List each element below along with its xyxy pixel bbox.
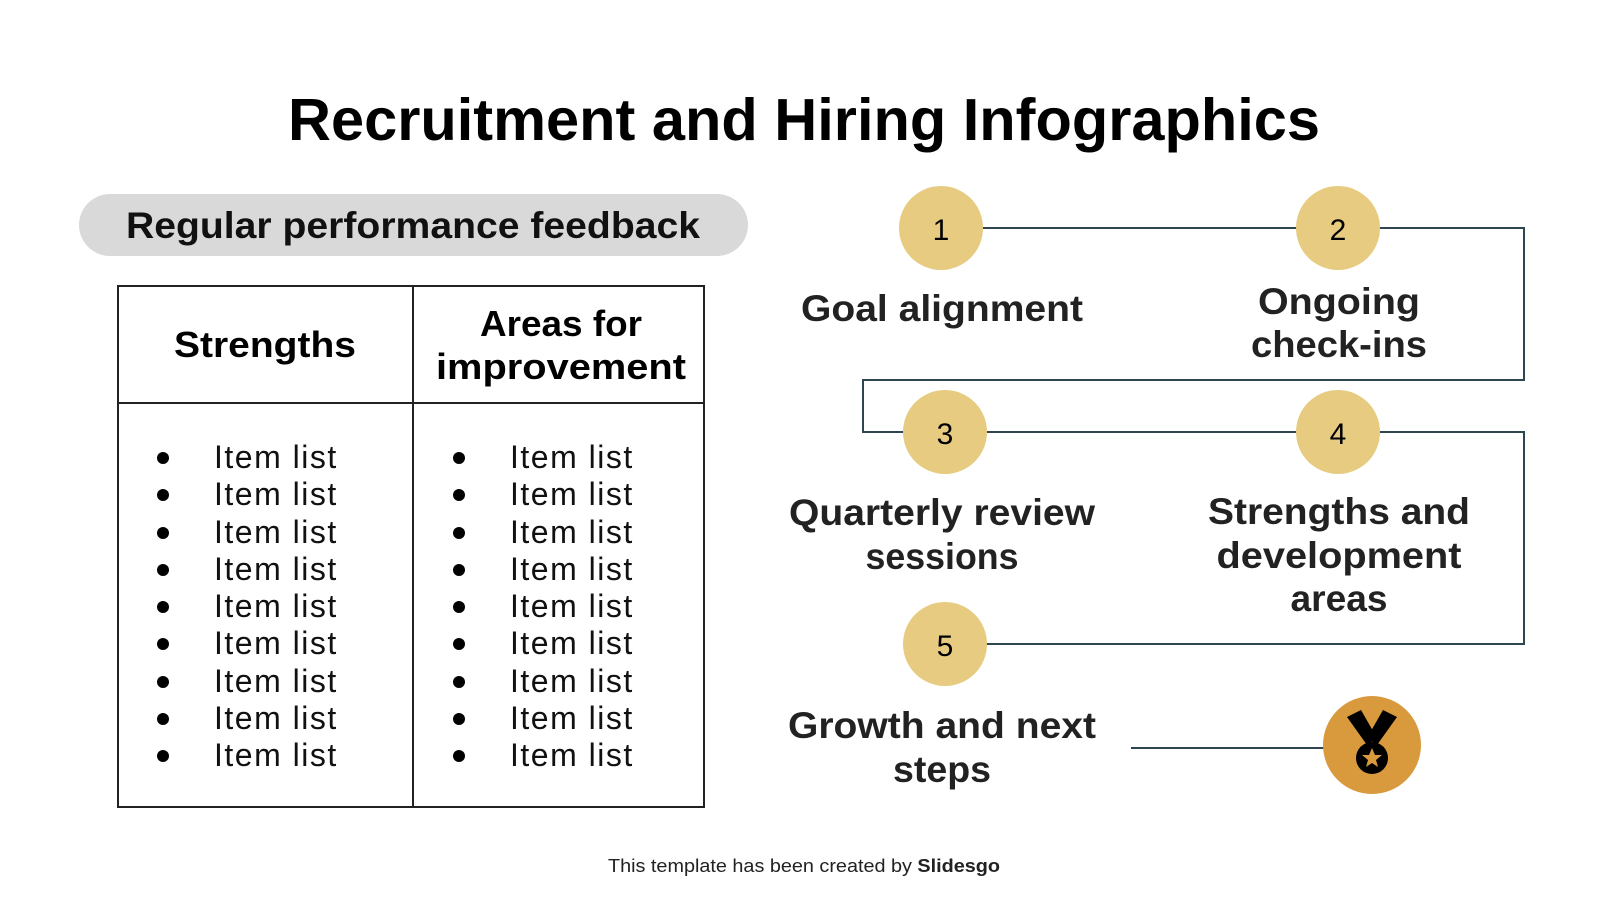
label 4: development bbox=[1216, 535, 1462, 576]
list: areas: Item list bbox=[510, 663, 634, 699]
connector path bbox=[863, 228, 1524, 644]
label 2: check-ins bbox=[1251, 324, 1427, 365]
header: areas for improvement: improvement bbox=[436, 346, 686, 387]
step 3: 3 bbox=[937, 418, 953, 451]
list: areas: Item list bbox=[510, 700, 634, 736]
title: Recruitment and Hiring Infographics bbox=[288, 87, 1320, 153]
list: strengths: Item list bbox=[214, 588, 338, 624]
list: areas: Item list bbox=[510, 625, 634, 661]
pill heading bbox=[79, 194, 748, 256]
list: strengths: Item list bbox=[214, 514, 338, 550]
label 4: areas bbox=[1290, 578, 1388, 619]
footer: This template has been created by Slidesgo bbox=[608, 856, 1000, 876]
list: strengths: Item list bbox=[214, 439, 338, 475]
list: strengths bbox=[157, 439, 338, 773]
step 2 bbox=[1296, 186, 1380, 270]
label 2: Ongoing bbox=[1258, 281, 1420, 322]
header: strengths: Strengths bbox=[174, 324, 356, 365]
label 5: Growth and next bbox=[788, 705, 1096, 746]
step 3 bbox=[903, 390, 987, 474]
list: areas bbox=[453, 439, 634, 773]
label 5: steps bbox=[893, 749, 991, 790]
list: strengths: Item list bbox=[214, 476, 338, 512]
step 5 bbox=[903, 602, 987, 686]
list: strengths: Item list bbox=[214, 551, 338, 587]
table bbox=[118, 286, 704, 807]
label 3: Quarterly review bbox=[789, 492, 1095, 533]
list: areas: Item list bbox=[510, 476, 634, 512]
list: strengths: Item list bbox=[214, 663, 338, 699]
step 4: 4 bbox=[1330, 418, 1346, 451]
label 1: Goal alignment bbox=[801, 288, 1083, 329]
step 4 bbox=[1296, 390, 1380, 474]
step 2: 2 bbox=[1330, 214, 1346, 247]
list: areas: Item list bbox=[510, 588, 634, 624]
list: areas: Item list bbox=[510, 551, 634, 587]
list: strengths: Item list bbox=[214, 700, 338, 736]
list: areas: Item list bbox=[510, 514, 634, 550]
header: areas for improvement: Areas for bbox=[480, 303, 642, 344]
list: areas: Item list bbox=[510, 737, 634, 773]
label 4: Strengths and bbox=[1208, 491, 1470, 532]
list: areas: Item list bbox=[510, 439, 634, 475]
step 5: 5 bbox=[937, 630, 953, 663]
step 1 bbox=[899, 186, 983, 270]
list: strengths: Item list bbox=[214, 737, 338, 773]
pill heading: Regular performance feedback bbox=[126, 205, 700, 246]
arrow: line to medal bbox=[1131, 747, 1330, 749]
list: strengths: Item list bbox=[214, 625, 338, 661]
label 3: sessions bbox=[866, 536, 1018, 577]
icon: medal bbox=[1323, 696, 1421, 794]
step 1: 1 bbox=[933, 214, 949, 247]
